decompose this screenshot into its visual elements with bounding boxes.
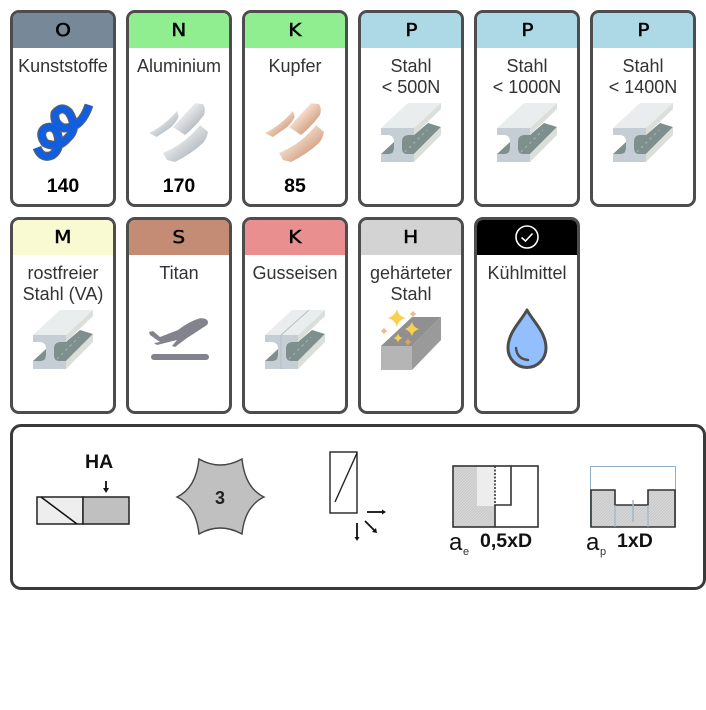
label: Kühlmittel: Kühlmittel [487, 263, 567, 283]
label: Stahl < 1000N [493, 56, 561, 97]
icon: axial depth ap [586, 466, 676, 558]
label: Stahl < 1400N [609, 56, 677, 97]
label: gehärteter Stahl: gehärteter [370, 263, 452, 283]
icon: axial depth ap: 1xD [617, 530, 653, 552]
panel: Aluminium [126, 10, 232, 207]
icon: blue plastic spiral [32, 104, 94, 161]
header: M: M [54, 227, 72, 248]
label: Stahl < 500N: < 500N [382, 77, 440, 97]
panel: Stahl 1400N [590, 10, 696, 207]
panel: Kunststoffe [10, 10, 116, 207]
icon: radial depth ae [449, 466, 538, 558]
panel: Kupfer [242, 10, 348, 207]
icon: copper shards [265, 103, 324, 162]
header: check icon on black [477, 220, 577, 255]
header: S [129, 220, 229, 255]
label: rostfreier Stahl (VA): rostfreier [27, 263, 98, 283]
header: P [361, 13, 461, 48]
icon: steel beam [381, 103, 441, 162]
icon: six-flute star: 3 [215, 488, 225, 508]
icon: water drop [506, 308, 548, 369]
icon: steel beam [613, 103, 673, 162]
icon: HA shank: HA [85, 451, 113, 473]
label: Aluminium: Aluminium [137, 56, 221, 76]
label: Stahl < 1000N: Stahl [506, 56, 548, 76]
icon: radial depth ae: a [449, 529, 463, 556]
header: O [13, 13, 113, 48]
icon: steel beam [33, 310, 93, 369]
header: P [593, 13, 693, 48]
value: 170: 170 [163, 175, 195, 197]
label: Stahl < 500N [382, 56, 440, 97]
label: Kupfer: Kupfer [268, 56, 322, 76]
icon: airplane taking off [149, 318, 209, 360]
icon: hardened steel block with sparkles [380, 309, 441, 370]
label: Gusseisen: Gusseisen [252, 263, 338, 283]
icon: aluminium shards [149, 103, 208, 162]
label: Stahl < 500N: Stahl [390, 56, 432, 76]
icon: axial depth ap: p [600, 546, 606, 558]
header: P: P [521, 20, 533, 41]
icon: steel beam [497, 103, 557, 162]
label: Stahl < 1400N: < 1400N [609, 77, 677, 97]
header: S: S [173, 227, 185, 248]
header: P: P [405, 20, 417, 41]
panel: Titan [126, 217, 232, 414]
icon: radial depth ae: 0,5xD [480, 530, 532, 552]
icon: cutting directions [330, 452, 386, 541]
icon: radial depth ae: e [463, 546, 469, 558]
header: N: N [171, 20, 187, 41]
header: K: K [288, 227, 302, 248]
panel: tool data [10, 424, 706, 590]
icon: HA shank [37, 451, 129, 524]
label: Kunststoffe: Kunststoffe [18, 56, 108, 76]
header: K [245, 13, 345, 48]
panel: Kühlmittel [474, 217, 580, 414]
header: P [477, 13, 577, 48]
header: O: O [55, 20, 71, 41]
header: P: P [637, 20, 649, 41]
header: H [361, 220, 461, 255]
panel: rostfreier Stahl [10, 217, 116, 414]
icon: six-flute star [177, 459, 264, 534]
icon: cast iron beam [265, 310, 325, 369]
label: Titan: Titan [159, 263, 199, 283]
value: 85: 85 [284, 175, 306, 197]
panel: Gusseisen [242, 217, 348, 414]
icon: axial depth ap: a [586, 529, 600, 556]
label: Stahl < 1400N: Stahl [622, 56, 664, 76]
label: gehärteter Stahl: Stahl [390, 284, 432, 304]
label: rostfreier Stahl (VA) [23, 263, 103, 304]
label: Stahl < 1000N: < 1000N [493, 77, 561, 97]
header: K: K [288, 20, 302, 41]
header: K [245, 220, 345, 255]
header: N [129, 13, 229, 48]
label: gehärteter Stahl [370, 263, 452, 304]
panel: Stahl 1000N [474, 10, 580, 207]
header: M [13, 220, 113, 255]
label: rostfreier Stahl (VA): Stahl (VA) [23, 284, 103, 304]
panel: Stahl 500N [358, 10, 464, 207]
panel: gehärteter Stahl [358, 217, 464, 414]
header: H: H [403, 227, 419, 248]
value: 140: 140 [47, 175, 79, 197]
